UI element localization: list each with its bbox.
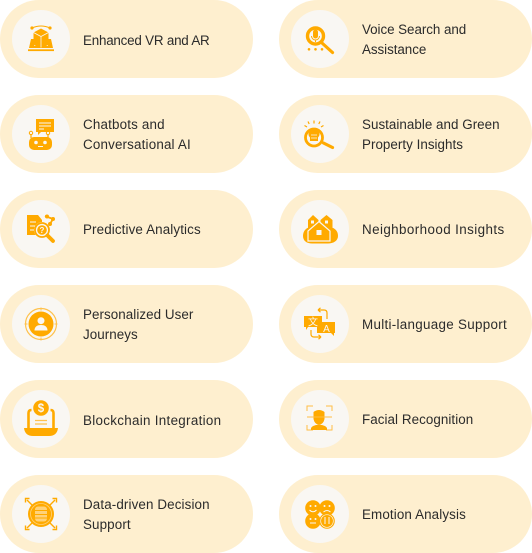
icon: document magnifier: ? [40,226,45,235]
card: Data-driven Decision Support [0,475,253,553]
icon: user target [12,295,70,353]
label: Neighborhood Insights [362,222,505,237]
label: Data-driven Decision [83,497,210,512]
icon: face scan [291,390,349,448]
icon: voice search [291,10,349,68]
label [83,117,191,152]
card: Multi-language Support [279,285,532,363]
label [83,307,194,342]
icon: translation bubbles: 文 [308,316,318,328]
label: Predictive Analytics [83,222,201,237]
icon: database circle [12,485,70,543]
icon: chatbot [12,105,70,163]
icon: translation bubbles: A [323,324,330,335]
card: Voice Search and Assistance [279,0,532,78]
icon: VR cube [12,10,70,68]
label: Property Insights [362,137,463,152]
icon: translation bubbles [291,295,349,353]
label: Multi-language Support [362,317,507,332]
card: Blockchain Integration [0,380,253,458]
icon: document magnifier [12,200,70,258]
label: Assistance [362,42,426,57]
icon: green bulb magnifier [291,105,349,163]
label: Enhanced VR and AR [83,33,210,48]
icon: laptop coin: $ [38,403,45,415]
label: Voice Search and [362,22,466,37]
card: Neighborhood Insights [279,190,532,268]
card: Sustainable and Green Property Insights [279,95,532,173]
label: Emotion Analysis [362,507,466,522]
label: Personalized User [83,307,193,322]
card: Chatbots and Conversational AI [0,95,253,173]
label: Journeys [83,327,138,342]
card: Predictive Analytics [0,190,253,268]
card: Enhanced VR and AR [0,0,253,78]
label: Chatbots and [83,117,165,132]
label [362,117,500,152]
icon: houses [291,200,349,258]
card: Facial Recognition [279,380,532,458]
card: Emotion Analysis [279,475,532,553]
label: Facial Recognition [362,412,473,427]
label: Support [83,517,131,532]
icon: laptop coin [12,390,70,448]
label: Blockchain Integration [83,413,221,428]
label: Sustainable and Green [362,117,500,132]
card: Personalized User Journeys [0,285,253,363]
label [83,497,210,532]
label [362,22,466,57]
icon: emotion faces [291,485,349,543]
label: Conversational AI [83,137,191,152]
